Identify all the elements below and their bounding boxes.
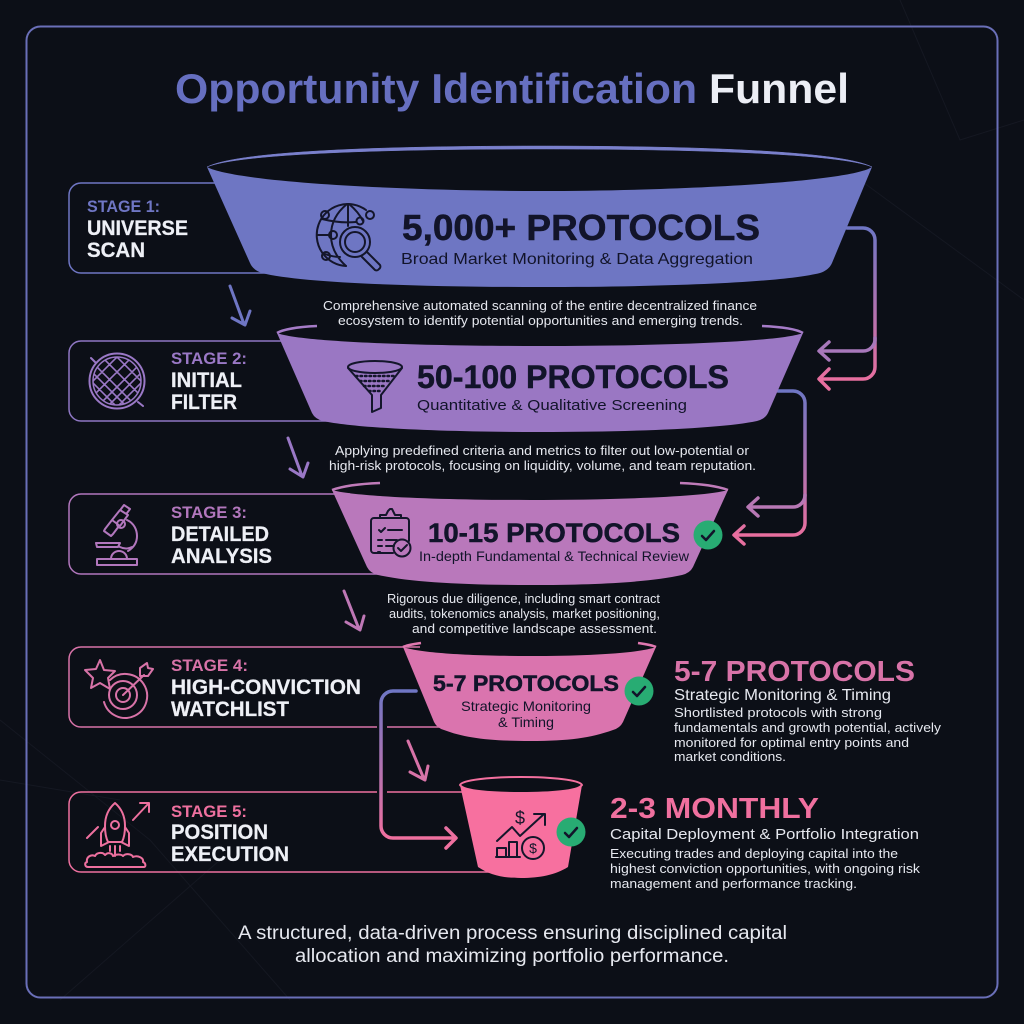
icon: microscope [96,505,137,565]
stage 3 label: DETAILED [171,522,269,546]
stage 2 label [171,349,247,414]
stage 3 label: STAGE 3: [171,503,247,522]
funnel 5 side text: 2-3 MONTHLY [610,793,819,825]
funnel 3 subtitle: In-depth Fundamental & Technical Review [419,549,689,564]
stage 2 label: STAGE 2: [171,349,247,368]
stage 2 label: FILTER [171,390,237,414]
funnel 5 side text: management and performance tracking. [610,877,857,891]
stage 1 label [87,197,188,262]
stage 4 label: HIGH-CONVICTION [171,675,361,699]
funnel 3 description: audits, tokenomics analysis, market positioning, [389,606,660,621]
title: Opportunity Identification Funnel [175,65,849,112]
stage 5 label: EXECUTION [171,842,289,866]
funnel 5 [460,777,586,878]
funnel 5 side text: highest conviction opportunities, with ongoing risk [610,862,921,876]
icon: rocket [85,803,149,867]
funnel 4 side text: Shortlisted protocols with strong [674,705,882,720]
footer statement: A structured, data-driven process ensuring disciplined capital [238,923,787,944]
funnel 4 side text [674,656,942,764]
stage 4 label: WATCHLIST [171,697,289,721]
funnel 4 [403,643,656,741]
funnel 3 [332,483,728,585]
funnel 4 side text: market conditions. [674,749,786,764]
funnel 5 side text: Capital Deployment & Portfolio Integration [610,826,919,843]
funnel 3 description: and competitive landscape assessment. [412,621,657,636]
funnel 1 [207,146,872,287]
badge: check [694,520,722,550]
funnel 2 subtitle: Quantitative & Qualitative Screening [417,397,687,414]
stage 5 panel [69,792,490,872]
stage 5 label: STAGE 5: [171,802,247,821]
funnel 3 description: Rigorous due diligence, including smart contract [387,591,660,606]
funnel 1 count: 5,000+ PROTOCOLS [402,207,760,248]
stage 4 label [171,656,361,721]
funnel 5 side text [610,793,921,891]
funnel 4 side text: monitored for optimal entry points and [674,735,909,750]
funnel 3 description [387,591,660,636]
icon: growth chart and coin: $ [529,840,537,856]
connector: funnel 1 to funnel 2 [819,228,875,389]
icon: clipboard [371,509,410,556]
arrow: stage 1 to 2 [230,286,250,325]
icon: funnel [348,361,402,412]
funnel 1 description [323,298,757,328]
stage 4 label: STAGE 4: [171,656,248,675]
funnel 4 side text: Strategic Monitoring & Timing [674,687,891,704]
connector: funnel 2 to funnel 3 [734,391,805,544]
icon: growth chart and coin: $ [515,808,525,828]
arrow: stage 2 to 3 [288,438,308,477]
funnel 5 side text: Executing trades and deploying capital into the [610,847,898,861]
funnel 1 description: ecosystem to identify potential opportunities and emerging trends. [338,313,743,328]
funnel 1 subtitle: Broad Market Monitoring & Data Aggregation [401,251,753,268]
footer statement: allocation and maximizing portfolio performance. [295,946,729,967]
stage 2 panel [69,340,330,421]
stage 1 label: SCAN [87,238,145,262]
funnel 2 [277,326,803,432]
funnel 2 description [329,443,756,473]
funnel 2 count: 50-100 PROTOCOLS [417,359,729,395]
stage 3 panel [69,494,385,574]
funnel 2 description: high-risk protocols, focusing on liquidity, volume, and team reputation. [329,458,756,473]
icon: target and star [85,660,153,718]
stage 3 label: ANALYSIS [171,544,272,568]
connector: funnel 4 to funnel 5 [381,691,456,848]
funnel 4 subtitle: & Timing [498,714,554,730]
funnel 4 side text: 5-7 PROTOCOLS [674,656,915,688]
stage 1 label: STAGE 1: [87,197,160,216]
funnel 4 subtitle [461,698,591,730]
arrow: stage 4 to 5 [408,741,428,780]
icon: growth chart and coin [496,808,545,859]
icon: globe with magnifier [317,204,380,270]
badge: check [556,818,586,846]
funnel 1 description: Comprehensive automated scanning of the entire decentralized finance [323,298,757,313]
stage 4 panel [69,647,450,727]
funnel 3 count: 10-15 PROTOCOLS [428,518,680,548]
funnel 4 subtitle: Strategic Monitoring [461,698,591,714]
arrow: stage 3 to 4 [344,591,364,630]
funnel 4 count: 5-7 PROTOCOLS [433,671,619,696]
footer statement [238,923,787,967]
stage 1 panel [69,183,270,273]
badge: check [624,676,654,706]
stage 2 label: INITIAL [171,368,242,392]
funnel 4 side text: fundamentals and growth potential, actively [674,720,942,735]
stage 5 label [171,802,289,866]
stage 3 label [171,503,272,568]
stage 1 label: UNIVERSE [87,216,188,240]
funnel 2 description: Applying predefined criteria and metrics to filter out low-potential or [335,443,750,458]
stage 5 label: POSITION [171,820,268,844]
icon: sieve [88,352,146,410]
